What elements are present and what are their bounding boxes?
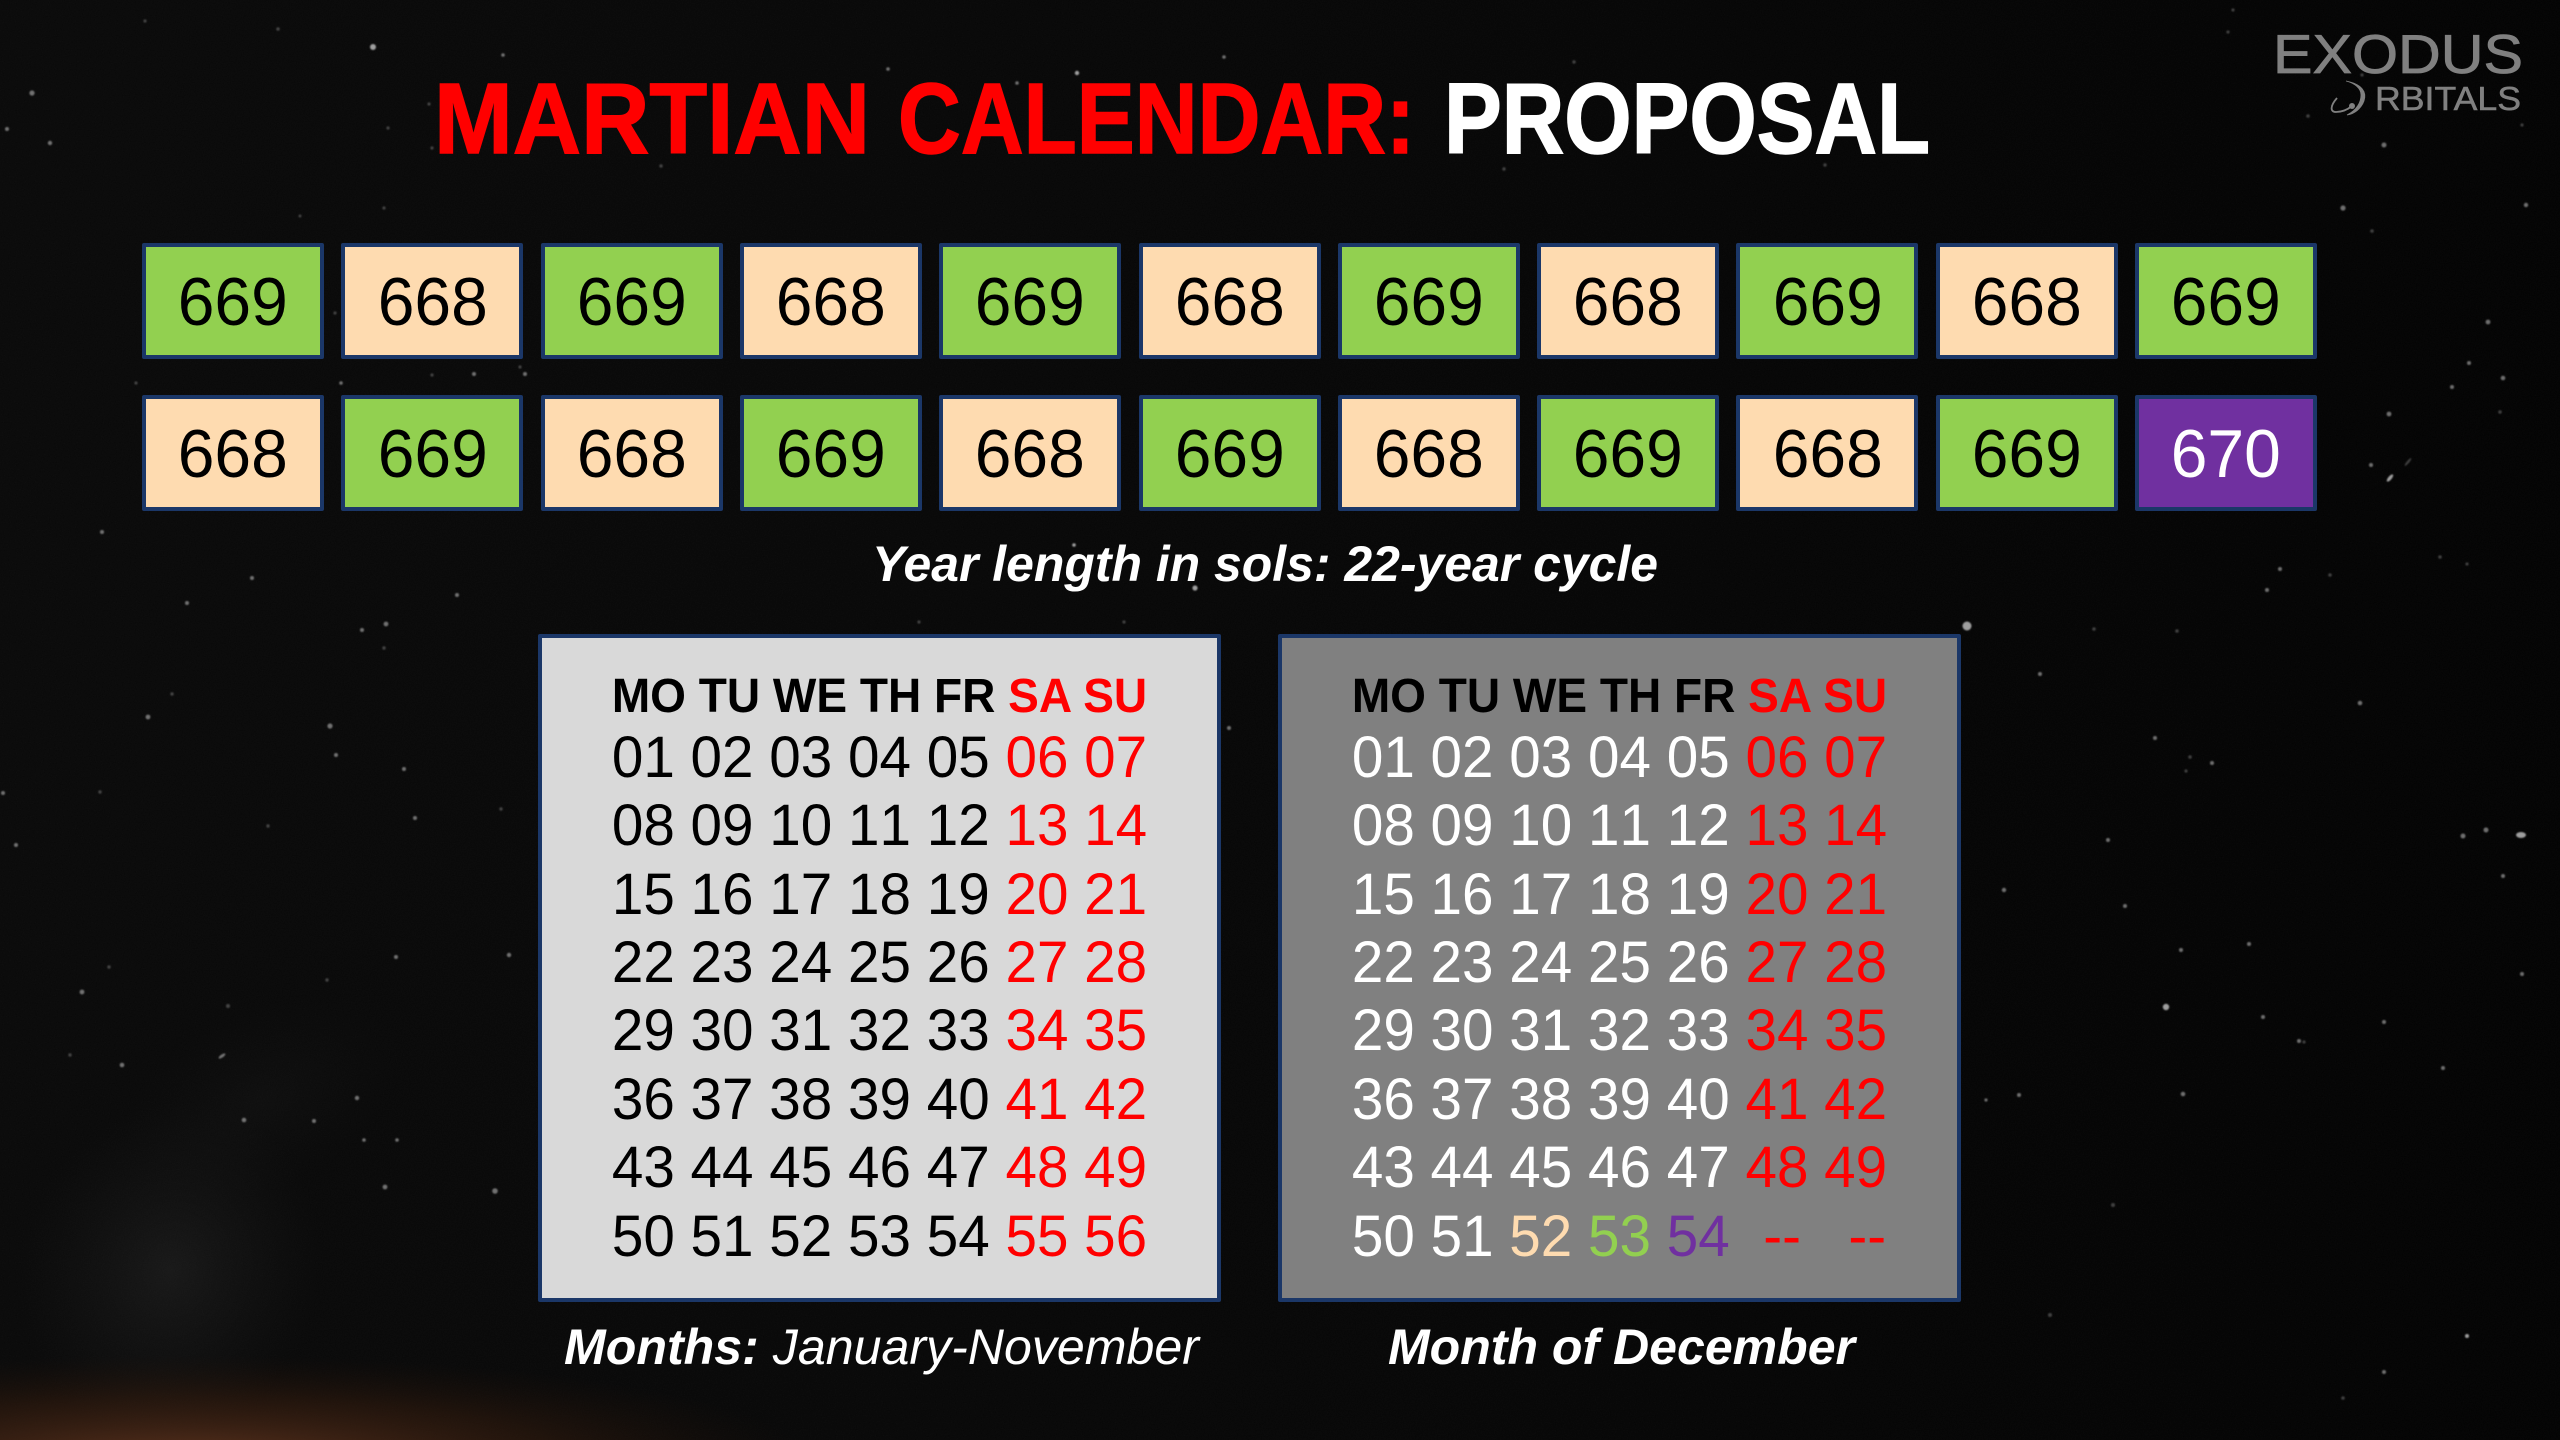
- year box 8: 668: [1573, 264, 1683, 340]
- day grid: 36 37 38 39 40 41 42: [1352, 1067, 1887, 1132]
- year box 17: 669: [1174, 416, 1285, 492]
- year box 18: [1338, 395, 1520, 511]
- year box 20: [1736, 395, 1918, 511]
- year box 16: 668: [975, 416, 1085, 492]
- year length row 2: [142, 395, 2317, 511]
- day grid: --: [1848, 1204, 1886, 1269]
- year box 14: 668: [577, 416, 687, 492]
- year box 1: [142, 243, 324, 359]
- year box 21: 669: [1972, 416, 2082, 492]
- panel: December calendar: [1278, 634, 1961, 1302]
- year box 19: 669: [1573, 416, 1683, 492]
- caption: year length: Year length in sols: 22-year cycle: [872, 536, 1658, 592]
- day grid: 36 37 38 39 40 41 42: [612, 1067, 1147, 1132]
- year box 4: 668: [776, 264, 886, 340]
- year box 9: [1736, 243, 1918, 359]
- year box 7: 669: [1374, 264, 1484, 340]
- year box 14: [541, 395, 723, 511]
- day grid: 15 16 17 18 19 20 21: [1352, 862, 1887, 927]
- year box 2: [341, 243, 523, 359]
- day grid: 22 23 24 25 26 27 28: [612, 930, 1147, 995]
- year length row 1: [142, 243, 2317, 359]
- year box 10: 668: [1972, 264, 2082, 340]
- day grid: 50 51 52 53 54: [1352, 1204, 1730, 1269]
- year box 2: 668: [377, 264, 487, 340]
- year box 3: 669: [577, 264, 687, 340]
- day grid: 08 09 10 11 12 13 14: [612, 793, 1147, 858]
- day grid: 29 30 31 32 33 34 35: [1352, 998, 1887, 1063]
- logo: Exodus Orbitals: EXODUS: [2273, 23, 2523, 85]
- year box 18: 668: [1374, 416, 1484, 492]
- logo: Exodus Orbitals: RBITALS: [2375, 80, 2521, 117]
- year box 5: 669: [975, 264, 1085, 340]
- year box 21: [1936, 395, 2118, 511]
- day grid: 43 44 45 46 47 48 49: [612, 1135, 1147, 1200]
- day grid: [612, 725, 1147, 1269]
- day grid: 22 23 24 25 26 27 28: [1352, 930, 1887, 995]
- year box 15: 669: [776, 416, 886, 492]
- day grid: 43 44 45 46 47 48 49: [1352, 1135, 1887, 1200]
- year box 17: [1138, 395, 1320, 511]
- year box 5: [939, 243, 1121, 359]
- day grid: 50 51 52 53 54 55 56: [612, 1204, 1147, 1269]
- year box 12: [142, 395, 324, 511]
- year box 9: 669: [1772, 264, 1882, 340]
- day grid: 08 09 10 11 12 13 14: [1352, 793, 1887, 858]
- caption: months: Months: January-November: [564, 1319, 1201, 1375]
- day grid: [1352, 725, 1887, 1269]
- weekday header: MO TU WE TH FR SA SU: [1352, 670, 1887, 722]
- year box 11: [2135, 243, 2317, 359]
- year box 6: 668: [1174, 264, 1285, 340]
- day grid: 29 30 31 32 33 34 35: [612, 998, 1147, 1063]
- year box 4: [740, 243, 922, 359]
- year box 16: [939, 395, 1121, 511]
- day grid: 01 02 03 04 05 06 07: [1352, 725, 1887, 790]
- caption: December: Month of December: [1388, 1319, 1858, 1375]
- year box 13: 669: [377, 416, 487, 492]
- year box 11: 669: [2171, 264, 2281, 340]
- year box 22: leap: 670: [2171, 416, 2281, 492]
- day grid: --: [1763, 1204, 1801, 1269]
- year box 3: [541, 243, 723, 359]
- year box 6: [1138, 243, 1320, 359]
- day grid: 15 16 17 18 19 20 21: [612, 862, 1147, 927]
- year box 13: [341, 395, 523, 511]
- year box 12: 668: [178, 416, 288, 492]
- year box 15: [740, 395, 922, 511]
- year box 22: leap: [2135, 395, 2317, 511]
- weekday header: MO TU WE TH FR SA SU: [612, 670, 1147, 722]
- logo: Exodus Orbitals: [2273, 23, 2523, 117]
- year box 8: [1537, 243, 1719, 359]
- year box 20: 668: [1772, 416, 1882, 492]
- year box 7: [1338, 243, 1520, 359]
- day grid: 01 02 03 04 05 06 07: [612, 725, 1147, 790]
- panel: January-November calendar: [538, 634, 1221, 1302]
- year box 19: [1537, 395, 1719, 511]
- year box 10: [1936, 243, 2118, 359]
- year box 1: 669: [178, 264, 288, 340]
- title: [434, 70, 1930, 170]
- icon: orbit swirl: [2332, 81, 2365, 115]
